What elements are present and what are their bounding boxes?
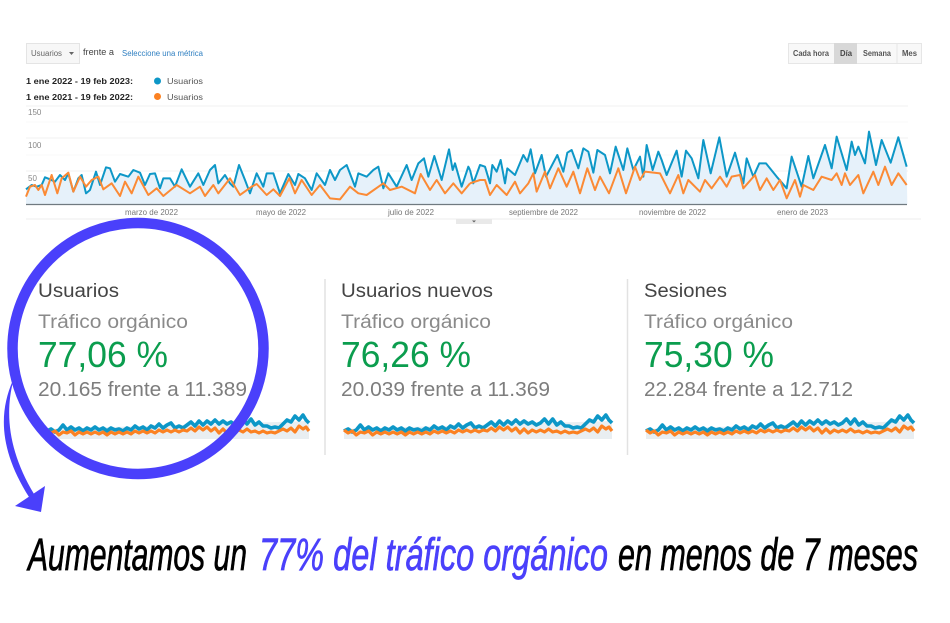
sparkline: Usuarios nuevos	[344, 415, 612, 439]
divider 1	[324, 279, 326, 455]
panel: Usuarios: 77,06 %	[38, 334, 168, 375]
panel: Usuarios	[38, 281, 309, 439]
x axis labels: enero de 2023	[777, 208, 829, 217]
legend: Usuarios	[167, 76, 203, 86]
panel: Sesiones: Sesiones	[644, 281, 727, 302]
x axis labels: marzo de 2022	[125, 208, 179, 217]
sparkline: Sesiones	[646, 415, 914, 439]
panel: Usuarios nuevos	[341, 281, 612, 439]
y axis labels: 50	[28, 174, 37, 183]
granularity buttons: Día	[840, 49, 853, 58]
blue series	[26, 132, 907, 193]
metric selector	[26, 44, 204, 64]
x axis labels	[125, 208, 829, 217]
main line chart	[26, 106, 921, 224]
orange series	[26, 167, 907, 199]
legend: 1 ene 2021 - 19 feb 2022:	[26, 92, 133, 102]
y axis labels: 150	[28, 108, 42, 117]
granularity buttons: Semana	[863, 49, 891, 58]
granularity buttons: Cada hora	[793, 49, 830, 58]
panel: Sesiones: 75,30 %	[644, 334, 774, 375]
panel: Usuarios: Tráfico orgánico	[38, 312, 188, 333]
x axis labels: mayo de 2022	[256, 208, 307, 217]
highlight circle	[12, 223, 264, 474]
panel: Usuarios nuevos: Tráfico orgánico	[341, 312, 491, 333]
metric selector: frente a	[83, 47, 114, 57]
y axis labels: 100	[28, 141, 42, 150]
legend: Usuarios	[167, 92, 203, 102]
panel: Usuarios: 20.165 frente a 11.389	[38, 379, 247, 401]
panel: Usuarios nuevos: 20.039 frente a 11.369	[341, 379, 550, 401]
x axis labels: septiembre de 2022	[509, 208, 579, 217]
legend	[26, 76, 203, 102]
panel: Sesiones: 22.284 frente a 12.712	[644, 379, 853, 401]
headline: Aumentamos un	[26, 529, 247, 580]
chart area fill	[26, 149, 470, 204]
panel: Sesiones	[644, 281, 914, 439]
arrow	[4, 378, 45, 512]
sparkline: Usuarios	[47, 415, 309, 439]
y axis labels	[28, 108, 42, 183]
metric selector: Usuarios	[31, 49, 62, 58]
x axis labels: noviembre de 2022	[639, 208, 707, 217]
metric selector: Seleccione una métrica	[122, 49, 204, 58]
legend: 1 ene 2022 - 19 feb 2023:	[26, 76, 133, 86]
x axis labels: julio de 2022	[387, 208, 435, 217]
granularity buttons: Mes	[902, 49, 918, 58]
granularity buttons	[788, 43, 922, 64]
headline: 77% del tráfico orgánico	[259, 529, 608, 580]
headline	[26, 529, 918, 580]
panel: Usuarios: Usuarios	[38, 281, 119, 302]
panel: Usuarios nuevos: 76,26 %	[341, 334, 471, 375]
divider 2	[626, 279, 628, 455]
panel: Sesiones: Tráfico orgánico	[644, 312, 793, 333]
panel: Usuarios nuevos: Usuarios nuevos	[341, 281, 493, 302]
